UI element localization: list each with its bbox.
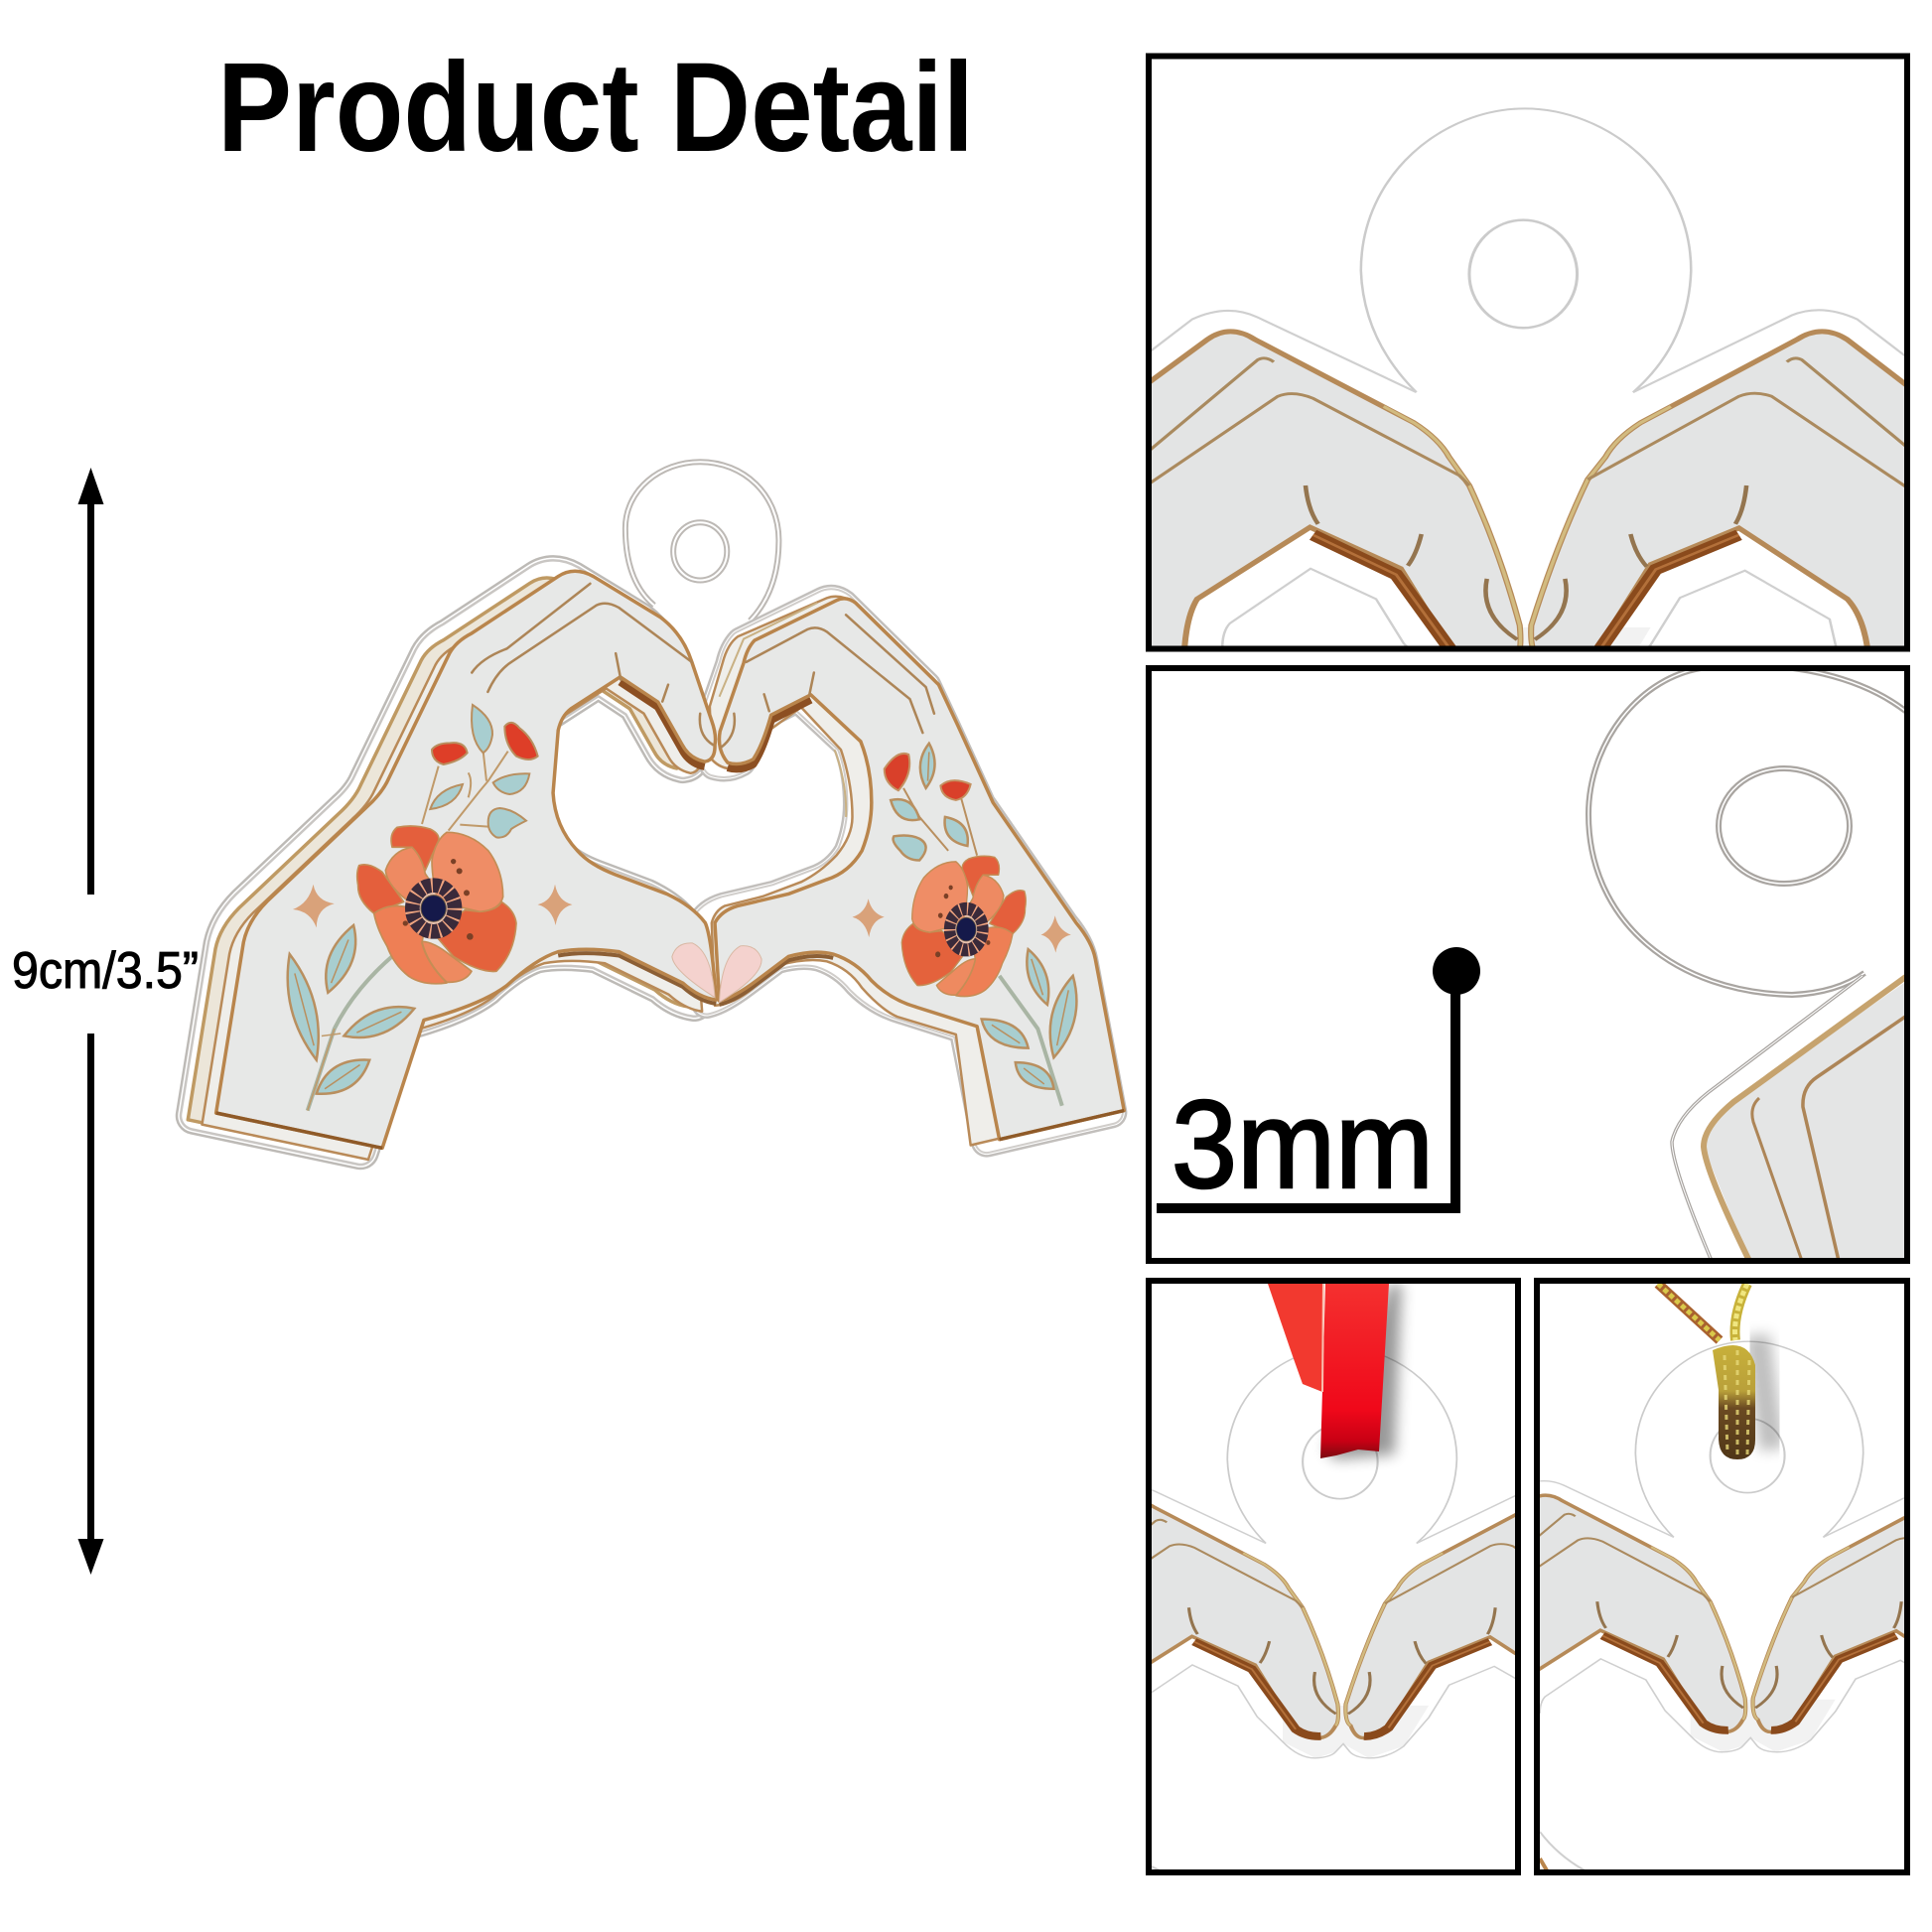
right floral decoration	[885, 744, 1076, 1106]
back layers right hand	[710, 597, 1108, 1145]
pink heart halves	[672, 943, 761, 1003]
main product: heart hands ornament	[188, 462, 1124, 1160]
right hand front	[715, 599, 1124, 1140]
gold cord	[1658, 1284, 1772, 1459]
panel: hanging hole close-up	[1146, 54, 1910, 651]
thick copper edges	[558, 682, 833, 1005]
left poppy and upper sprig	[357, 705, 538, 984]
left lower leaves	[288, 925, 414, 1111]
panel: 3mm thickness close-up	[1149, 665, 1916, 1261]
height dimension arrow	[77, 468, 103, 1575]
back layers left hand	[188, 578, 702, 1160]
3mm callout pointer	[1157, 947, 1480, 1213]
red ribbon	[1268, 1284, 1402, 1459]
acrylic tab and hole	[1588, 665, 1916, 1261]
right poppy	[901, 856, 1026, 997]
acrylic hanging tab	[625, 462, 778, 621]
height label: 9cm/3.5”	[12, 942, 199, 1000]
gold sparkles	[293, 885, 1071, 953]
panel: gold cord option	[1534, 1278, 1910, 1875]
title: Product Detail	[217, 37, 974, 179]
acrylic outline left	[195, 574, 694, 1151]
finger crease lines	[472, 584, 934, 748]
left hand front	[216, 571, 716, 1148]
acrylic outline right	[702, 601, 1111, 1142]
bottom hand edges	[216, 1111, 1124, 1148]
panel: red ribbon option	[1146, 1278, 1521, 1875]
3mm label: 3mm	[1172, 1076, 1434, 1214]
